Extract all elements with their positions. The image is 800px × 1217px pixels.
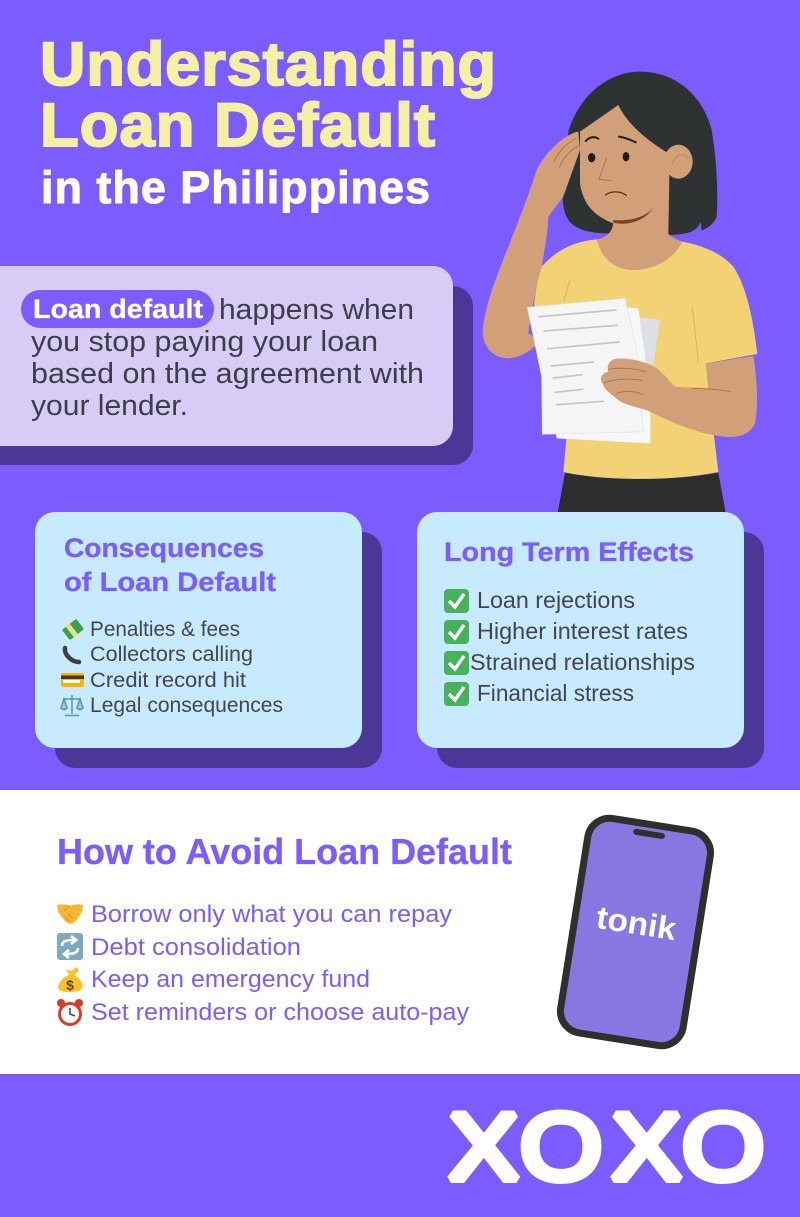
list: how to avoid: Debt consolidation bbox=[91, 934, 301, 961]
list: consequences: Collectors calling bbox=[90, 643, 253, 666]
list: how to avoid bbox=[91, 901, 469, 1026]
definition text bbox=[31, 294, 424, 422]
illustration: phone with tonik logo bbox=[557, 815, 714, 1049]
list: consequences: Legal consequences bbox=[90, 694, 283, 717]
title bbox=[40, 30, 497, 213]
list: consequences: Credit record hit bbox=[90, 669, 246, 692]
definition text: you stop paying your loan bbox=[31, 326, 378, 358]
icon: alarm clock bbox=[57, 999, 83, 1024]
list: long term effects: Financial stress bbox=[477, 680, 634, 706]
icon: telephone bbox=[65, 648, 79, 662]
list: long term effects: Loan rejections bbox=[477, 587, 635, 613]
panel: consequences bbox=[35, 512, 382, 768]
list: how to avoid: Borrow only what you can repay bbox=[91, 901, 452, 928]
list: consequences: Penalties & fees bbox=[90, 618, 240, 641]
heading: consequences: Consequences bbox=[64, 533, 264, 563]
list: how to avoid: Set reminders or choose auto-pay bbox=[91, 999, 469, 1026]
title: Understanding bbox=[40, 30, 497, 98]
list: long term effects: Strained relationships bbox=[470, 649, 695, 675]
definition text: your lender. bbox=[31, 390, 188, 422]
highlighted term bbox=[21, 290, 214, 328]
icon: money bag: $ bbox=[66, 977, 74, 993]
definition text: happens when bbox=[219, 294, 414, 326]
highlighted term: Loan default bbox=[33, 294, 203, 324]
panel: how to avoid loan default bbox=[0, 790, 800, 1074]
title: Loan Default bbox=[40, 91, 436, 159]
title: in the Philippines bbox=[41, 162, 431, 213]
list: long term effects bbox=[470, 587, 695, 706]
illustration: worried woman holding papers bbox=[483, 72, 757, 518]
panel: definition bbox=[0, 266, 473, 465]
definition text: based on the agreement with bbox=[31, 358, 424, 390]
heading: how to avoid: How to Avoid Loan Default bbox=[57, 831, 512, 872]
illustration: phone with tonik logo: tonik bbox=[594, 899, 679, 947]
heading: long term effects: Long Term Effects bbox=[444, 537, 694, 567]
icon: handshake bbox=[57, 904, 83, 924]
heading: consequences: of Loan Default bbox=[64, 567, 276, 597]
heading: consequences bbox=[64, 533, 276, 597]
list: long term effects: Higher interest rates bbox=[477, 618, 688, 644]
icon: balance scale bbox=[61, 695, 83, 716]
closing: XOXO: XOXO bbox=[448, 1095, 764, 1200]
icon: credit card bbox=[61, 673, 84, 687]
icon: money with wings bbox=[61, 619, 84, 640]
icons: check marks bbox=[444, 589, 469, 706]
list: how to avoid: Keep an emergency fund bbox=[91, 966, 370, 993]
panel: long term effects bbox=[417, 512, 764, 768]
icon: arrows button bbox=[57, 933, 83, 960]
icon: money bag bbox=[58, 967, 83, 993]
list: consequences bbox=[90, 618, 283, 717]
